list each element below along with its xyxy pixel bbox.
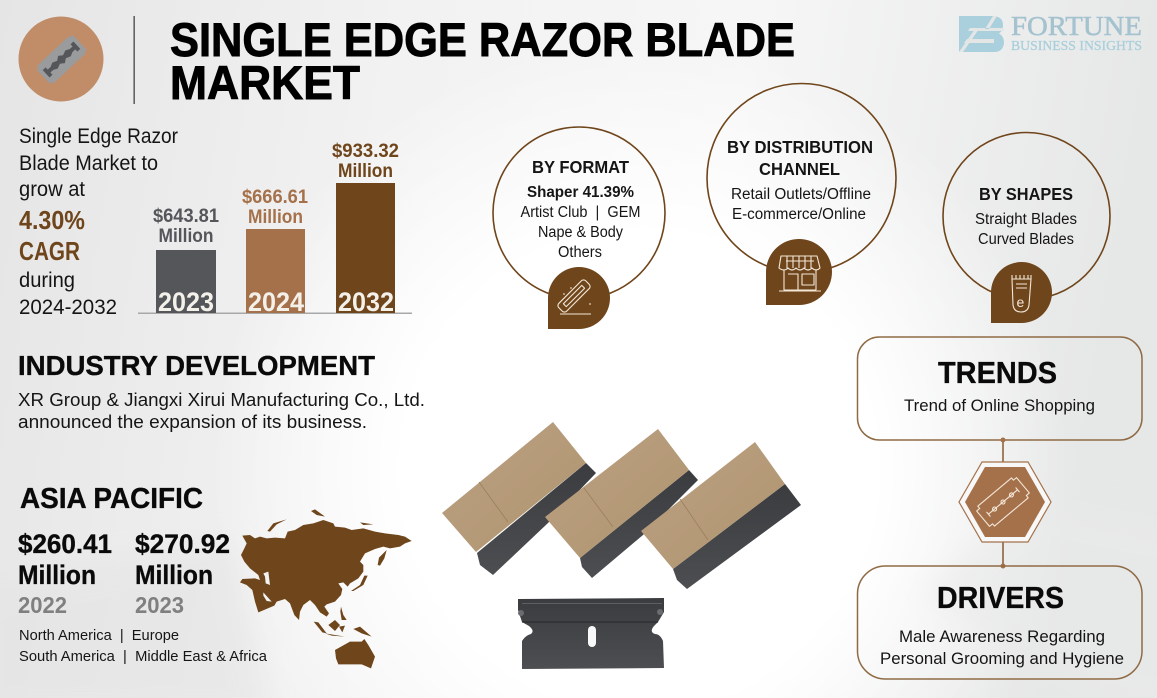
panel: drivers: Male Awareness Regarding <box>899 627 1105 646</box>
panel: by format: BY FORMAT <box>532 157 629 177</box>
panel: asia pacific figures: 2022 <box>18 592 67 618</box>
panel: by distribution channel: BY DISTRIBUTION <box>727 137 873 157</box>
bar chart: market size: 2024 <box>248 287 304 317</box>
panel: drivers: DRIVERS <box>937 580 1064 615</box>
photo: razor blades in paper sleeves <box>442 422 801 669</box>
logo: Fortune Business Insights: BUSINESS INSIGHTS <box>1011 38 1142 53</box>
panel: by format: Artist Club | GEM <box>520 204 640 221</box>
bar chart: market size: Million <box>338 161 393 182</box>
text block: CAGR statement: during <box>19 269 75 292</box>
icon: storefront <box>766 239 832 305</box>
panel: by shapes: BY SHAPES <box>979 184 1073 204</box>
panel: by distribution channel: Retail Outlets/Offline <box>731 186 871 203</box>
panel: asia pacific figures: Million <box>18 560 96 590</box>
icon: shaper razor <box>548 267 610 329</box>
panel: asia pacific figures <box>18 483 268 665</box>
bar chart: market size: Million <box>158 226 214 247</box>
panel: trends: TRENDS <box>938 355 1057 390</box>
panel: by distribution channel <box>707 84 896 305</box>
text block: CAGR statement: 2024-2032 <box>19 296 117 319</box>
bar chart: market size: 2023 <box>158 287 214 317</box>
text block: CAGR statement: 4.30% <box>19 205 85 235</box>
panel: asia pacific figures: 2023 <box>135 592 184 618</box>
icon: trimmer <box>991 262 1052 323</box>
text block: CAGR statement: Blade Market to <box>19 152 158 175</box>
bar chart: market size: 2032 <box>338 287 394 317</box>
logo: Fortune Business Insights <box>959 11 1142 53</box>
panel: by distribution channel: E-commerce/Online <box>732 206 866 223</box>
panel: trends: Trend of Online Shopping <box>904 396 1095 415</box>
panel: by format: Nape & Body <box>538 224 623 241</box>
text block: industry development <box>18 350 425 432</box>
panel: by shapes: Curved Blades <box>978 231 1074 248</box>
panel: asia pacific figures: ASIA PACIFIC <box>20 483 203 515</box>
panel: asia pacific figures: Million <box>135 560 213 590</box>
bar chart: market size: $666.61 <box>242 187 308 208</box>
title: MARKET <box>170 56 360 109</box>
logo: Fortune Business Insights: FORTUNE <box>1011 11 1142 41</box>
panel: asia pacific figures: North America | Europe <box>19 628 179 644</box>
text block: industry development: XR Group & Jiangxi Xirui Manufacturing Co., Ltd. <box>18 390 425 410</box>
title: SINGLE EDGE RAZOR BLADE <box>170 13 795 66</box>
text block: CAGR statement: CAGR <box>19 236 80 266</box>
bar chart: market size <box>138 141 412 317</box>
map: Asia Pacific <box>240 509 412 668</box>
panel: by shapes <box>943 132 1110 323</box>
bar chart: market size: $643.81 <box>153 206 219 227</box>
text block: CAGR statement: Single Edge Razor <box>19 125 178 148</box>
text block: CAGR statement: grow at <box>19 178 85 201</box>
text block: industry development: announced the expansion of its business. <box>18 412 367 432</box>
panel: asia pacific figures: $260.41 <box>18 529 112 559</box>
panel: by distribution channel: CHANNEL <box>759 159 840 179</box>
panel: by shapes: Straight Blades <box>975 211 1077 228</box>
header icon: razor blade in circle <box>18 16 104 102</box>
panel: trends <box>858 337 1142 440</box>
panel: drivers <box>858 566 1142 679</box>
panel: asia pacific figures: $270.92 <box>135 529 230 559</box>
text block: industry development: INDUSTRY DEVELOPMENT <box>18 350 375 381</box>
panel: by format: Others <box>558 244 602 261</box>
panel: by format: Shaper 41.39% <box>527 184 634 201</box>
panel: asia pacific figures: South America | Middle East & Africa <box>19 649 268 665</box>
text block: CAGR statement <box>19 125 178 319</box>
panel: by format <box>493 127 665 329</box>
icon: trimmer: e <box>1016 294 1024 310</box>
title <box>134 13 795 109</box>
panel: drivers: Personal Grooming and Hygiene <box>880 649 1124 668</box>
bar chart: market size: $933.32 <box>332 141 399 162</box>
connector with hexagon blade icon <box>959 438 1051 568</box>
bar chart: market size: Million <box>248 207 303 228</box>
